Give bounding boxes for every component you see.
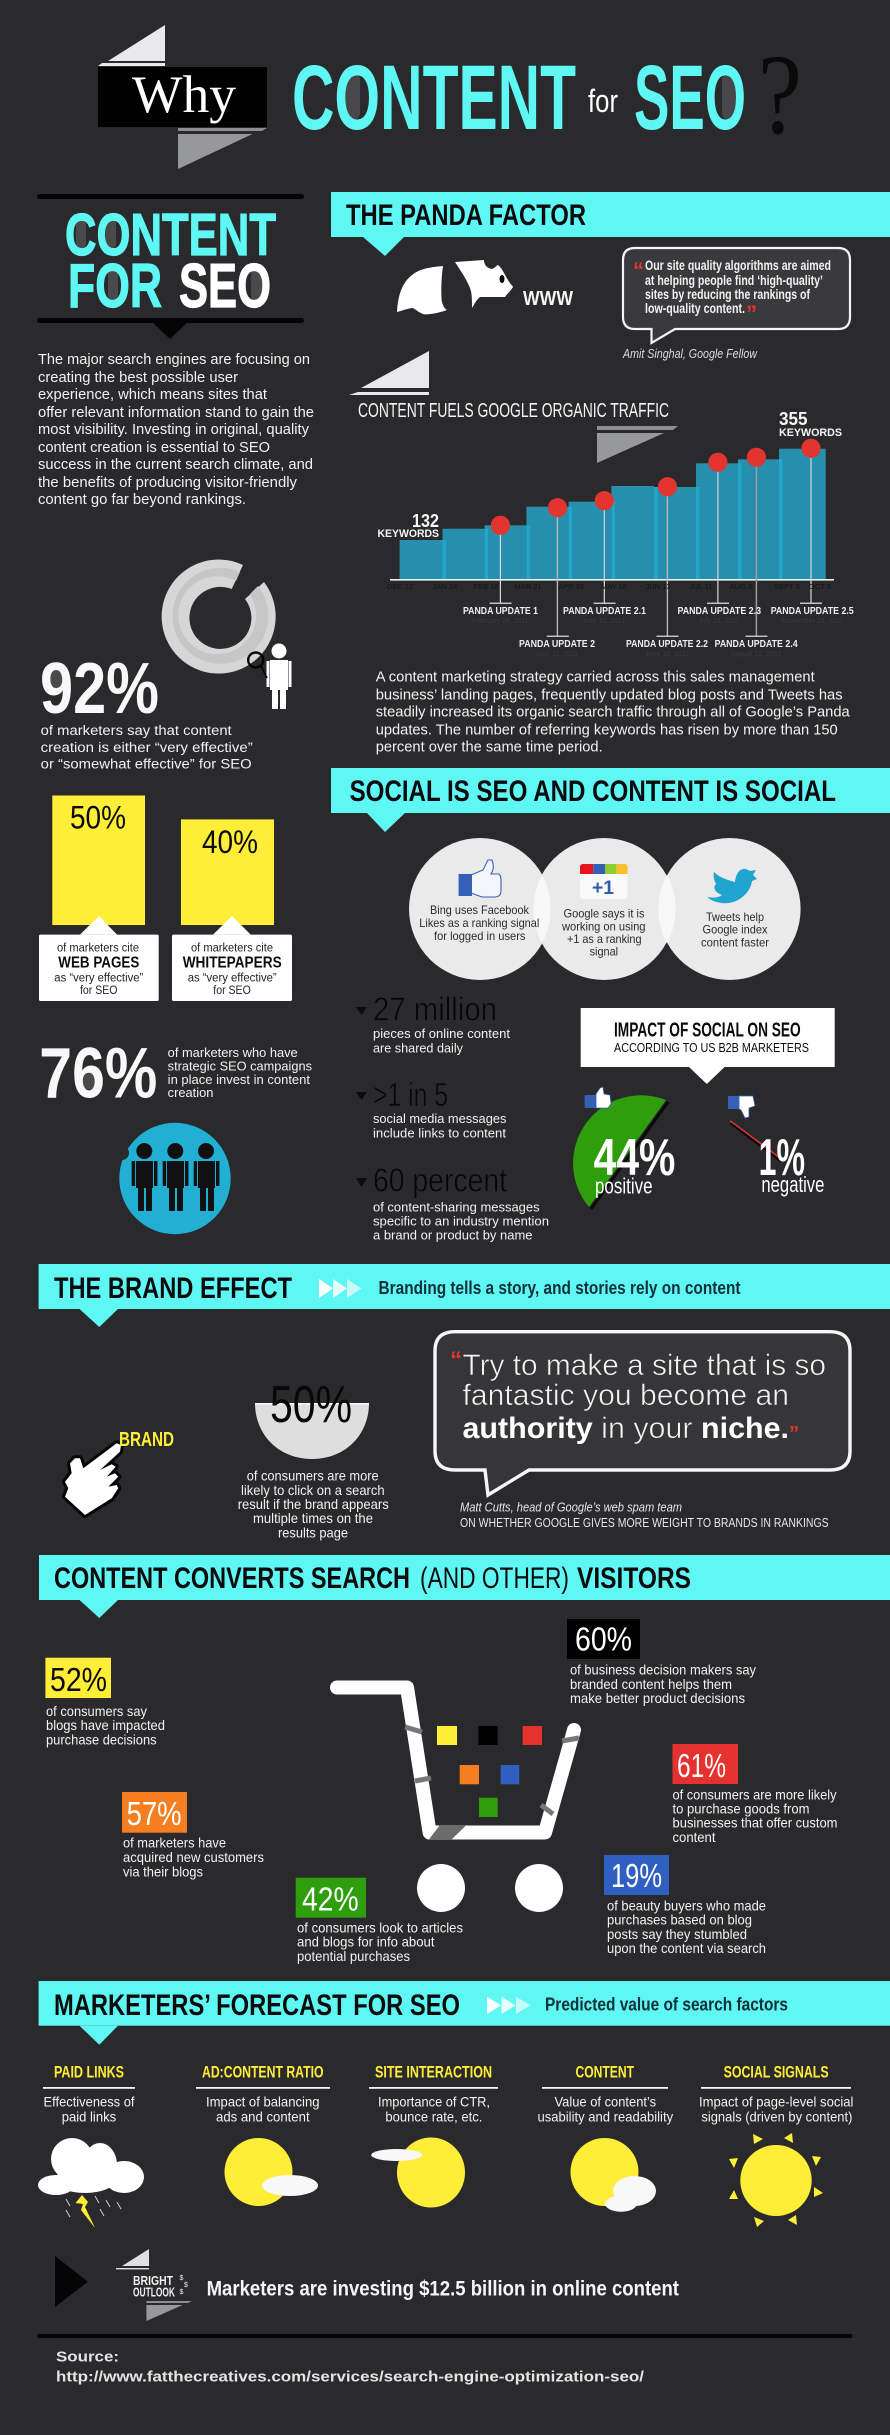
- stat: 76 percent: strategic SEO campaigns: [168, 1060, 312, 1074]
- stat: 42 percent articles and blogs: of consumers look to articles: [297, 1920, 463, 1936]
- chart description: percent over the same time period.: [376, 739, 603, 756]
- axis labels: [387, 582, 831, 591]
- heading: content for SEO: FOR: [68, 252, 162, 321]
- stat: web pages 50 percent: of marketers cite: [57, 943, 139, 955]
- stat: whitepapers 40 percent: as “very effective”: [188, 972, 277, 984]
- intro paragraph: most visibility. Investing in original, quality: [38, 421, 309, 438]
- axis labels: MAY 16: [601, 582, 627, 591]
- keyword labels: KEYWORDS: [378, 528, 439, 540]
- source: Source:: [56, 2349, 119, 2366]
- banner: the panda factor: THE PANDA FACTOR: [346, 199, 586, 232]
- stat: 92 percent: creation is either “very effective”: [41, 740, 253, 755]
- intro paragraph: experience, which means sites that: [38, 386, 268, 403]
- pie: 1 percent negative: negative: [761, 1172, 824, 1197]
- text: bing and facebook: Likes as a ranking signal: [419, 916, 539, 930]
- panel: social signal circles: [409, 838, 801, 980]
- chart: content fuels google organic traffic: May 10, 2011: [583, 618, 625, 625]
- stat: 61 percent custom content: 61%: [677, 1747, 726, 1784]
- stat: web pages 50 percent: for SEO: [80, 985, 118, 997]
- forecast: social signals: Impact of page-level social: [699, 2094, 853, 2110]
- text: bing and facebook: [419, 903, 539, 943]
- chart: content fuels google organic traffic: [349, 351, 854, 658]
- icon: shopping cart: [337, 1688, 579, 1912]
- callout: bright outlook: $: [184, 2282, 188, 2289]
- forecast: site interaction: bounce rate, etc.: [385, 2109, 482, 2125]
- forecast: social signals: signals (driven by content): [701, 2109, 852, 2125]
- forecast: paid links: [38, 2062, 144, 2228]
- pie: 1 percent negative: [728, 1096, 824, 1197]
- stat: 52 percent blogs: purchase decisions: [46, 1731, 157, 1747]
- stat: 76 percent: 76%: [39, 1035, 157, 1114]
- stat: whitepapers 40 percent: for SEO: [213, 985, 251, 997]
- stat: 27 million: pieces of online content: [373, 1026, 510, 1041]
- forecast: content: usability and readability: [538, 2109, 673, 2125]
- stat: 92 percent: or “somewhat effective” for SEO: [41, 756, 252, 771]
- icon: three people on blue circle: [115, 1123, 231, 1234]
- stat: whitepapers 40 percent: 40%: [202, 824, 258, 860]
- intro paragraph: success in the current search climate, and: [38, 456, 313, 473]
- attribution: matt cutts: Matt Cutts, head of Google’s web spam team: [460, 1500, 682, 1515]
- panel: marketer stats left column: [39, 560, 312, 1234]
- heading: content for SEO: [65, 202, 276, 321]
- stat: 42 percent articles and blogs: 42%: [302, 1881, 359, 1918]
- chart heading: CONTENT FUELS GOOGLE ORGANIC TRAFFIC: [358, 400, 669, 422]
- stat: web pages 50 percent: 50%: [70, 800, 126, 836]
- stat: 50 percent of consumers: results page: [278, 1524, 348, 1540]
- stat: 50 percent of consumers: of consumers are more: [247, 1468, 379, 1484]
- stat: 19 percent beauty buyers: [604, 1855, 766, 1956]
- panda update labels: PANDA UPDATE 2.2: [626, 639, 708, 650]
- forecast: paid links: paid links: [62, 2109, 116, 2125]
- pie: 44 percent positive: [573, 1087, 675, 1209]
- forecast: social signals: SOCIAL SIGNALS: [724, 2062, 829, 2081]
- stat: 52 percent blogs: of consumers say: [46, 1703, 147, 1719]
- panda update labels: PANDA UPDATE 2.5: [771, 606, 854, 617]
- stat: 19 percent beauty buyers: purchases based on blog: [607, 1912, 752, 1928]
- text: google plus one: signal: [590, 945, 618, 959]
- chart: content fuels google organic traffic: September 28, 2011: [781, 618, 844, 625]
- stat: 50 percent of consumers: result if the brand appears: [238, 1496, 389, 1512]
- text: tweets: Google index: [702, 923, 768, 937]
- icon: sun with thin cloud: [371, 2138, 465, 2208]
- chart: content fuels google organic traffic: February 24, 2011: [472, 618, 529, 625]
- stat: web pages 50 percent: as “very effective”: [54, 972, 143, 984]
- panda update labels: [463, 606, 854, 650]
- forecast: paid links: Effectiveness of: [44, 2094, 135, 2110]
- icon: full sun: [729, 2133, 823, 2227]
- stat: 61 percent custom content: of consumers are more likely: [672, 1786, 836, 1802]
- stat: web pages 50 percent: [39, 796, 159, 1001]
- stat: 76 percent: [39, 1035, 312, 1114]
- keyword labels: KEYWORDS: [779, 427, 842, 439]
- intro paragraph: the benefits of producing visitor-friendly: [38, 474, 297, 491]
- axis labels: MAR 21: [514, 582, 542, 591]
- callout: bright outlook: [55, 2249, 679, 2321]
- stat: 92 percent: of marketers say that content: [41, 723, 232, 738]
- text: tweets: Tweets help: [706, 910, 764, 924]
- title: ?: [758, 31, 802, 158]
- stat: 57 percent new customers: of marketers have: [123, 1835, 226, 1851]
- stat: 42 percent articles and blogs: [296, 1878, 463, 1964]
- title: [98, 25, 802, 169]
- stat: whitepapers 40 percent: of marketers cite: [191, 943, 273, 955]
- panel: content for SEO intro: [37, 194, 314, 508]
- stat: more than 1 in 5: social media messages: [373, 1111, 507, 1126]
- intro paragraph: [38, 351, 314, 508]
- callout: amit singhal quote: “: [633, 258, 644, 283]
- banner: social is SEO and content is social: [331, 768, 890, 832]
- source: http://www.fatthecreatives.com/services/search-engine-optimization-seo/: [56, 2369, 645, 2386]
- keyword labels: 355: [779, 409, 808, 429]
- forecast: content: CONTENT: [576, 2062, 634, 2081]
- banner: the brand effect: [39, 1264, 890, 1327]
- icon: panda and www: [397, 260, 573, 314]
- callout: matt cutts quote: [435, 1332, 850, 1495]
- panda update labels: PANDA UPDATE 1: [463, 606, 538, 617]
- callout: impact heading: ACCORDING TO US B2B MARKETERS: [614, 1041, 809, 1055]
- heading: content for SEO: SEO: [179, 252, 271, 321]
- panel: sharing statistics: [356, 991, 549, 1243]
- stat: 76 percent: of marketers who have: [168, 1046, 298, 1060]
- icon: google plus one: +1: [592, 878, 614, 899]
- forecast: social signals: [699, 2062, 853, 2227]
- stat: 27 million: [356, 991, 510, 1056]
- panel: impact of social on SEO: [573, 1008, 835, 1209]
- callout: matt cutts quote: authority in your niche.: [462, 1412, 789, 1445]
- step bars: [400, 449, 826, 579]
- banner: the brand effect: THE BRAND EFFECT: [54, 1272, 292, 1305]
- forecast: ad to content ratio: [196, 2062, 330, 2206]
- icon: facebook thumb: [459, 860, 501, 897]
- heading: content for SEO: CONTENT: [65, 202, 276, 268]
- icon: twitter bird: [708, 869, 757, 903]
- forecast: site interaction: Importance of CTR,: [378, 2094, 490, 2110]
- title: CONTENT: [292, 47, 576, 149]
- keyword labels: 132: [412, 511, 439, 531]
- axis labels: JUN 13: [645, 582, 671, 591]
- callout: bright outlook: $: [180, 2289, 184, 2296]
- callout: bright outlook: OUTLOOK: [133, 2285, 175, 2300]
- forecast: ad to content ratio: Impact of balancing: [206, 2094, 320, 2110]
- chart description: business’ landing pages, frequently updated blog posts and Tweets has: [376, 686, 843, 703]
- panda update labels: PANDA UPDATE 2.3: [678, 606, 761, 617]
- chart heading: [349, 351, 678, 463]
- axis labels: APR 18: [558, 582, 584, 591]
- stat: 60 percent: 60 percent: [373, 1162, 507, 1199]
- stat: 92 percent: [40, 649, 253, 771]
- stat: 57 percent new customers: via their blogs: [123, 1863, 203, 1879]
- pie: 1 percent negative: 1%: [759, 1129, 805, 1187]
- axis labels: SEPT 5: [774, 582, 800, 591]
- axis labels: OCT 3: [809, 582, 831, 591]
- stat: 57 percent new customers: acquired new customers: [123, 1849, 264, 1865]
- stat: 60 percent: of content-sharing messages: [373, 1200, 540, 1215]
- text: google plus one: Google says it is: [564, 907, 644, 921]
- intro paragraph: offer relevant information stand to gain the: [38, 404, 314, 421]
- icon: pointing hand with brand label: BRAND: [119, 1429, 174, 1451]
- stat: 61 percent custom content: content: [672, 1829, 716, 1845]
- chart description: [376, 669, 850, 756]
- forecast: content: Value of content’s: [554, 2094, 656, 2110]
- stat: 42 percent articles and blogs: and blogs for info about: [297, 1934, 435, 1950]
- icon: pointing hand with brand label: [65, 1429, 174, 1515]
- forecast: site interaction: [369, 2062, 498, 2208]
- panda update labels: PANDA UPDATE 2: [519, 639, 595, 650]
- intro paragraph: The major search engines are focusing on: [38, 351, 310, 368]
- stat: whitepapers 40 percent: [172, 819, 292, 1001]
- stat: 57 percent new customers: [122, 1792, 264, 1879]
- stat: 52 percent blogs: blogs have impacted: [46, 1717, 165, 1733]
- callout: bright outlook: $: [180, 2275, 184, 2282]
- chart: content fuels google organic traffic: August 12, 2011: [731, 651, 781, 658]
- stat: 42 percent articles and blogs: potential purchases: [297, 1948, 410, 1964]
- pie: 44 percent positive: positive: [595, 1173, 652, 1198]
- stat: more than 1 in 5: [356, 1076, 507, 1141]
- callout: impact heading: IMPACT OF SOCIAL ON SEO: [614, 1020, 801, 1042]
- icon: google plus one: [580, 864, 628, 899]
- forecast: paid links: PAID LINKS: [54, 2062, 124, 2081]
- stat: 19 percent beauty buyers: of beauty buyers who made: [607, 1898, 766, 1914]
- callout: amit singhal quote: [623, 248, 850, 343]
- banner: content converts search visitors: [39, 1555, 890, 1618]
- source: [56, 2349, 645, 2386]
- callout: amit singhal quote: ”: [746, 301, 757, 326]
- chart: content fuels google organic traffic: June 16, 2011: [645, 651, 689, 658]
- stat: 76 percent: creation: [168, 1086, 213, 1100]
- panda update labels: PANDA UPDATE 2.1: [563, 606, 646, 617]
- forecast: site interaction: SITE INTERACTION: [375, 2062, 492, 2081]
- intro paragraph: content go far beyond rankings.: [38, 491, 246, 508]
- pie: 44 percent positive: 44%: [594, 1129, 675, 1187]
- text: google plus one: working on using: [561, 919, 646, 933]
- stat: 50 percent of consumers: 50%: [270, 1376, 352, 1434]
- callout: matt cutts quote: fantastic you become an: [462, 1379, 789, 1412]
- icon: panda and www: WWW: [523, 288, 573, 310]
- stat: more than 1 in 5: >1 in 5: [373, 1076, 448, 1113]
- stat: 50 percent of consumers: [238, 1376, 389, 1540]
- callout: amit singhal quote: at helping people find ‘high-quality’: [645, 272, 823, 288]
- forecast: content: [538, 2062, 673, 2212]
- axis labels: FEB 16: [473, 582, 499, 591]
- forecast: ad to content ratio: AD:CONTENT RATIO: [202, 2062, 324, 2081]
- stat: 60 percent business decision makers: of business decision makers say: [570, 1662, 756, 1678]
- axis labels: AUG 8: [730, 582, 752, 591]
- text: tweets: [701, 910, 769, 949]
- axis labels: JUL 11: [690, 582, 712, 591]
- stat: 60 percent business decision makers: branded content helps them: [570, 1676, 732, 1692]
- stat: 60 percent business decision makers: [567, 1619, 756, 1706]
- stat: 27 million: are shared daily: [373, 1041, 463, 1056]
- stat: 76 percent: in place invest in content: [168, 1073, 311, 1087]
- icon: storm cloud: [38, 2138, 144, 2228]
- stat: 92 percent: 92%: [40, 649, 159, 729]
- callout: amit singhal quote: low-quality content.: [645, 300, 745, 316]
- stat: 27 million: 27 million: [373, 991, 497, 1028]
- stat: web pages 50 percent: WEB PAGES: [58, 955, 139, 972]
- update stems: [490, 448, 822, 637]
- text: tweets: content faster: [701, 935, 769, 949]
- text: bing and facebook: for logged in users: [434, 929, 526, 943]
- title: for: [588, 83, 618, 119]
- icon: sun with small cloud: [224, 2138, 318, 2206]
- forecast: ad to content ratio: ads and content: [216, 2109, 310, 2125]
- chart description: steadily increased its organic search traffic through all of Google’s Panda: [376, 704, 850, 721]
- intro paragraph: creating the best possible user: [38, 369, 238, 386]
- stat: 57 percent new customers: 57%: [127, 1795, 182, 1832]
- text: bing and facebook: Bing uses Facebook: [430, 903, 530, 917]
- text: google plus one: +1 as a ranking: [567, 932, 642, 946]
- panda update labels: PANDA UPDATE 2.4: [715, 639, 798, 650]
- icon: ring and person with magnifier: [162, 560, 292, 709]
- title: Why: [132, 66, 236, 124]
- stat: 61 percent custom content: businesses that offer custom: [672, 1815, 838, 1831]
- callout: matt cutts quote: Try to make a site that is so: [462, 1349, 826, 1382]
- attribution: matt cutts: [460, 1500, 829, 1530]
- stat: 61 percent custom content: to purchase goods from: [672, 1801, 810, 1817]
- axis labels: JAN 24: [433, 582, 457, 591]
- attribution: amit singhal: Amit Singhal, Google Fellow: [622, 346, 758, 361]
- callout: amit singhal quote: Our site quality algorithms are aimed: [645, 257, 831, 273]
- stat: 19 percent beauty buyers: upon the content via search: [607, 1940, 766, 1956]
- update markers: [491, 439, 821, 535]
- banner: content converts search visitors: CONTENT CONVERTS SEARCH: [54, 1562, 410, 1595]
- callout: bright outlook: Marketers are investing $12.5 billion in online content: [207, 2278, 679, 2301]
- stat: more than 1 in 5: include links to content: [373, 1126, 506, 1141]
- stat: 61 percent custom content: [672, 1744, 838, 1845]
- stat: 60 percent: specific to an industry mention: [373, 1214, 549, 1229]
- stat: 50 percent of consumers: likely to click on a search: [241, 1482, 385, 1498]
- stat: 19 percent beauty buyers: posts say they stumbled: [607, 1926, 747, 1942]
- chart description: updates. The number of referring keywords has risen by more than 150: [376, 721, 838, 738]
- intro paragraph: content creation is essential to SEO: [38, 439, 270, 456]
- callout: amit singhal quote: sites by reducing the rankings of: [645, 286, 810, 302]
- stat: 60 percent: [356, 1162, 549, 1243]
- stat: 60 percent: a brand or product by name: [373, 1228, 532, 1243]
- banner: marketers forecast for SEO: Predicted value of search factors: [545, 1994, 788, 2015]
- title: SEO: [634, 47, 746, 149]
- stat: 50 percent of consumers: multiple times on the: [253, 1510, 373, 1526]
- callout: bright outlook: BRIGHT: [133, 2273, 173, 2288]
- stat: 52 percent blogs: 52%: [50, 1661, 107, 1698]
- banner: the panda factor: [331, 192, 890, 256]
- banner: content converts search visitors: (AND OTHER): [420, 1562, 569, 1595]
- banner: marketers forecast for SEO: MARKETERS’ FORECAST FOR SEO: [54, 1989, 460, 2022]
- stat: 60 percent business decision makers: 60%: [575, 1621, 632, 1658]
- chart description: A content marketing strategy carried across this sales management: [376, 669, 816, 686]
- callout: matt cutts quote: “: [450, 1347, 462, 1374]
- stat: whitepapers 40 percent: WHITEPAPERS: [183, 955, 282, 972]
- keyword labels: [378, 409, 842, 540]
- banner: the brand effect: Branding tells a story, and stories rely on content: [378, 1277, 740, 1298]
- stat: 52 percent blogs: [45, 1658, 165, 1747]
- chart: content fuels google organic traffic: July 23, 2011: [698, 618, 740, 625]
- axis labels: DEC 12: [387, 582, 413, 591]
- callout: impact heading: [581, 1008, 835, 1084]
- callout: matt cutts quote: ”: [789, 1423, 799, 1445]
- banner: marketers forecast for SEO: [39, 1981, 890, 2045]
- chart: content fuels google organic traffic: April 11, 2011: [536, 651, 578, 658]
- icon: sun with round cloud: [570, 2138, 656, 2212]
- stat: 60 percent business decision makers: make better product decisions: [570, 1690, 745, 1706]
- text: google plus one: [561, 907, 646, 959]
- banner: content converts search visitors: VISITORS: [577, 1562, 691, 1595]
- stat: 19 percent beauty buyers: 19%: [611, 1857, 662, 1894]
